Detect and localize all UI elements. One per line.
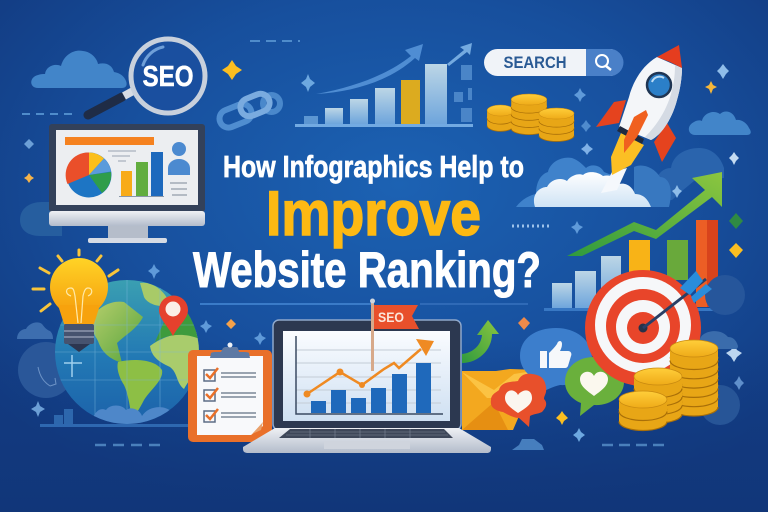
SEO flag (370, 298, 419, 371)
nose cone (657, 45, 682, 68)
clouds beneath rocket (516, 148, 724, 207)
cloud band (94, 406, 170, 424)
right bar chart with green arrow (544, 172, 737, 311)
title line 2: Improve (266, 179, 481, 249)
growth bar chart top (295, 43, 473, 127)
background details lower left (17, 264, 528, 445)
arrow (643, 271, 712, 328)
globe (55, 280, 202, 434)
title line 3: Website Ranking? (193, 242, 541, 298)
flame (611, 133, 644, 175)
left fin (596, 100, 626, 127)
white cloud (534, 172, 651, 207)
dark cloud right (652, 148, 724, 200)
mid cloud right (634, 165, 671, 207)
coin stacks top (487, 94, 574, 141)
red heart bubble (491, 374, 546, 427)
monitor (49, 124, 205, 243)
title (193, 149, 541, 298)
target with arrow (585, 270, 712, 386)
cloud top left (31, 51, 127, 88)
eurasia and africa (150, 332, 202, 389)
sparkles right (512, 213, 745, 450)
SEO label: SEO (142, 61, 194, 93)
sparkles upper right (512, 64, 739, 234)
north america (90, 302, 143, 363)
title line 1: How Infographics Help to (223, 149, 524, 184)
right fin (654, 123, 676, 162)
icon: chain link (217, 91, 280, 130)
line and bar chart on screen (296, 336, 443, 414)
light bulb (33, 250, 118, 352)
clipboard (188, 342, 272, 442)
green curved arrow (462, 320, 499, 363)
sparkles upper left (22, 41, 315, 183)
pie chart (66, 152, 112, 198)
dark cloud behind monitor (20, 202, 62, 236)
user icon (168, 142, 190, 195)
blue cloud left (516, 158, 629, 207)
checklist (204, 368, 256, 422)
inner flame (624, 110, 648, 153)
nozzle ring (617, 126, 644, 144)
orange header bar (65, 137, 154, 145)
greenland (140, 282, 166, 306)
flag label: SEO (378, 309, 404, 325)
cloud upper right (689, 112, 751, 135)
thumbs-up speech bubble (520, 328, 592, 393)
body (619, 57, 682, 140)
exhaust trail (601, 168, 627, 193)
search bar (484, 49, 624, 76)
rocket (596, 45, 682, 193)
search label: SEARCH (504, 53, 566, 72)
envelope (462, 369, 539, 430)
mini bars (108, 151, 164, 197)
porthole (647, 73, 671, 97)
coin stacks right (619, 340, 718, 430)
green heart bubble (565, 357, 624, 416)
south america (118, 360, 162, 410)
magnifying glass with SEO (88, 39, 205, 115)
map pin (159, 296, 188, 336)
laptop (243, 320, 491, 453)
